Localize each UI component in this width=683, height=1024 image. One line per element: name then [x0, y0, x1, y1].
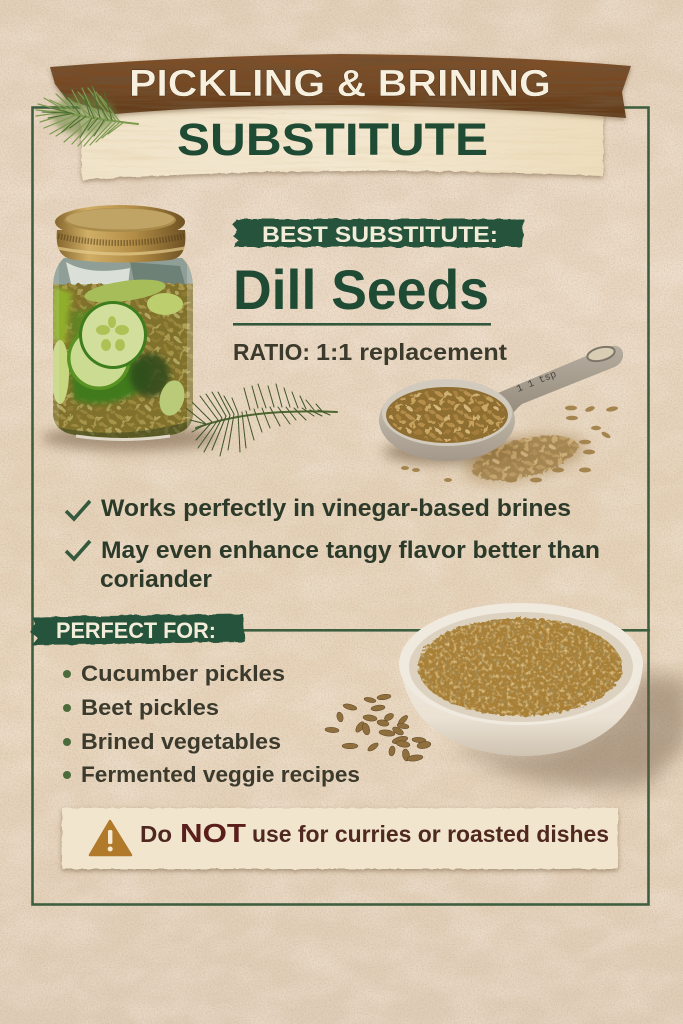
handle marking: 1 1 tsp — [515, 370, 558, 396]
perfect for banner — [30, 614, 245, 645]
seeds in spoon — [389, 389, 505, 441]
paper strip — [62, 808, 618, 869]
icon: warning triangle — [90, 821, 131, 855]
jar body — [50, 255, 196, 442]
use list — [63, 661, 360, 787]
list item 2: Beet pickles — [81, 695, 219, 720]
list item 4: Fermented veggie recipes — [81, 762, 360, 787]
spoon bowl — [379, 379, 515, 461]
jar gold lid — [55, 205, 185, 262]
dill sprig by jar — [186, 384, 337, 456]
ground seed pile — [418, 618, 622, 716]
handle hole — [586, 344, 616, 364]
benefits checklist — [66, 495, 600, 593]
bowl shadow — [450, 672, 683, 788]
spoon shadow — [383, 440, 527, 464]
warning text: use for curries or roasted dishes — [252, 821, 609, 847]
benefit 2: coriander — [100, 566, 212, 593]
icon: dill sprig top-left — [36, 86, 138, 146]
ratio — [233, 339, 507, 365]
paper plank: substitute — [80, 96, 603, 180]
heading line 1: PICKLING & BRINING — [129, 63, 551, 105]
list item 1: Cucumber pickles — [81, 661, 285, 686]
main name: Dill Seeds — [233, 258, 489, 321]
title banner — [36, 54, 631, 180]
section rule — [240, 629, 650, 632]
measuring spoon with dill seeds — [379, 344, 623, 492]
wood plank: pickling and brining — [50, 54, 631, 118]
scattered seeds under spoon — [401, 405, 618, 492]
jar ground shadow — [42, 425, 218, 451]
heading line 2: SUBSTITUTE — [177, 114, 488, 165]
warning callout — [62, 808, 618, 869]
green outer frame — [32, 108, 648, 904]
warning text: NOT — [180, 818, 246, 848]
best substitute section — [233, 219, 524, 365]
ceramic bowl — [400, 660, 643, 756]
underline — [233, 323, 491, 326]
ratio: RATIO: — [233, 339, 310, 365]
spoon handle — [498, 346, 623, 422]
green brush banner — [233, 219, 524, 247]
banner label: PERFECT FOR: — [56, 618, 216, 643]
loose whole seeds — [325, 693, 431, 762]
ratio: 1:1 replacement — [316, 339, 507, 365]
banner label: BEST SUBSTITUTE: — [262, 222, 498, 247]
pickle jar illustration — [42, 205, 218, 451]
warning text — [140, 818, 609, 848]
benefit 2: May even enhance tangy flavor better than — [101, 537, 600, 564]
benefit 1: Works perfectly in vinegar-based brines — [101, 495, 571, 522]
warning text: Do — [140, 821, 172, 847]
list item 3: Brined vegetables — [81, 729, 281, 754]
perfect for section — [30, 614, 650, 787]
benefit 2 — [66, 537, 600, 593]
bowl of ground dill seed — [399, 603, 683, 788]
